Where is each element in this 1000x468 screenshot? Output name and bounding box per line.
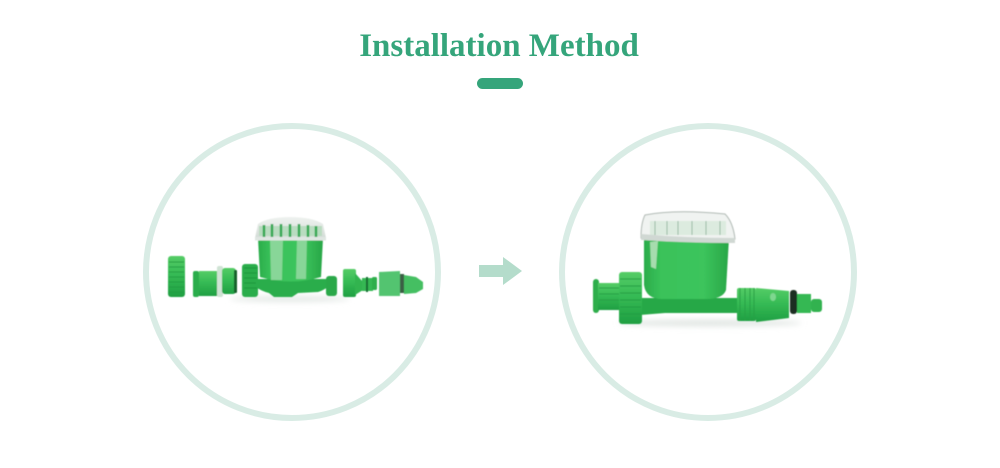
panel: assembled timer (562, 126, 854, 418)
circle frame left (146, 126, 438, 418)
icon: quick coupler (379, 271, 423, 296)
circle frame right (562, 126, 854, 418)
icon: shadow right (618, 320, 802, 326)
icon: threaded adapter (193, 266, 237, 297)
panel: disassembled parts (146, 126, 438, 418)
arrow (479, 257, 522, 285)
icon: timer body exploded (242, 217, 337, 297)
icon: hose tap connector (343, 269, 377, 297)
icon: shadow left (230, 296, 350, 302)
icon: assembled timer (593, 212, 822, 324)
icon: threaded nut (168, 256, 185, 297)
title underline (477, 78, 523, 89)
title: Installation Method (359, 28, 639, 64)
